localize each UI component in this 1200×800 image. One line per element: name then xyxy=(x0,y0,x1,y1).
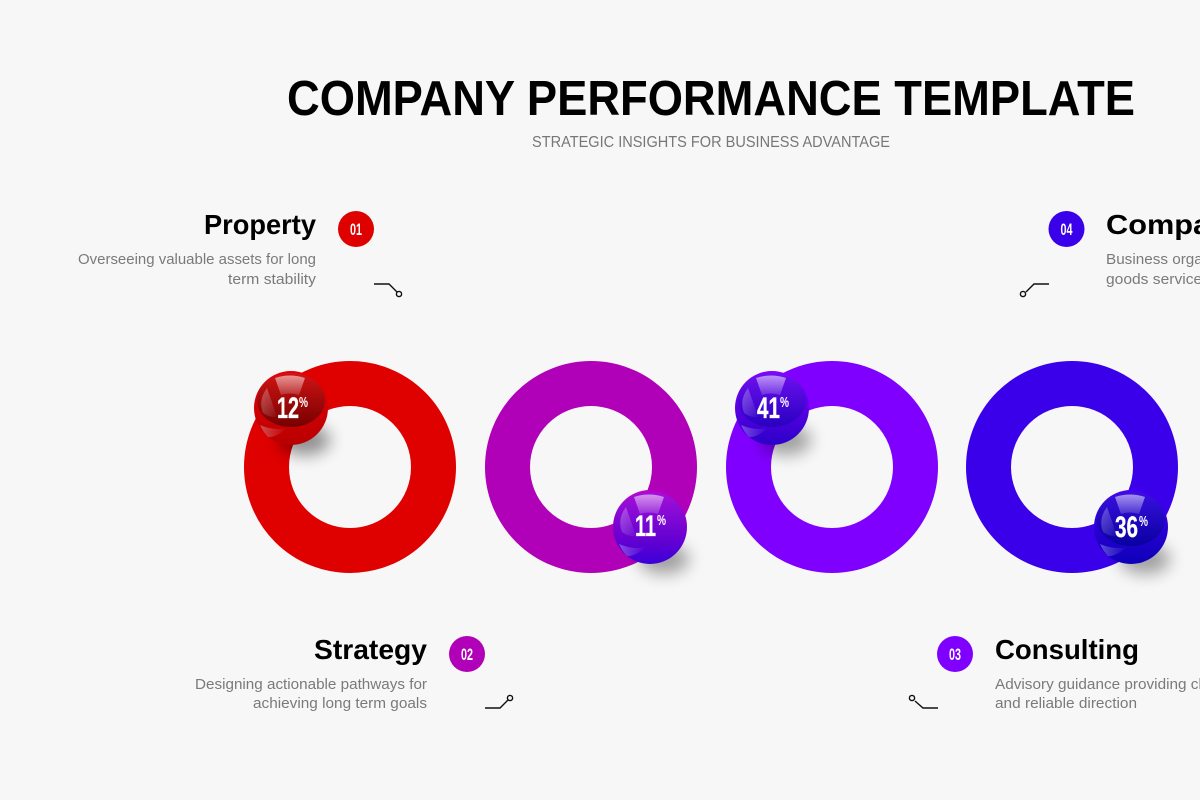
sphere: 36 percent xyxy=(1094,490,1170,574)
sphere: 11 percent xyxy=(613,490,689,574)
description: strategy xyxy=(195,676,427,712)
ring: strategy xyxy=(508,384,674,550)
sphere: 41 percent xyxy=(735,371,811,455)
number badge 02 xyxy=(449,636,485,672)
connector 01 xyxy=(374,284,402,297)
description: property: Overseeing valuable assets for long xyxy=(78,251,316,268)
title: COMPANY PERFORMANCE TEMPLATE xyxy=(287,72,1135,126)
description: consulting xyxy=(995,676,1200,712)
number badge 04: 04 xyxy=(1060,220,1073,239)
description: consulting: and reliable direction xyxy=(995,695,1137,712)
ring: property xyxy=(266,384,434,550)
subtitle: STRATEGIC INSIGHTS FOR BUSINESS ADVANTAGE xyxy=(532,134,890,151)
description: strategy: achieving long term goals xyxy=(253,695,427,712)
panel: consulting label xyxy=(909,634,1200,712)
sphere: 12 percent: % xyxy=(299,394,308,411)
sphere: 36 percent: % xyxy=(1139,513,1148,530)
sphere: 12 percent xyxy=(254,371,330,455)
panel: strategy label xyxy=(195,634,513,712)
connector 04 xyxy=(1020,284,1049,297)
description: property: term stability xyxy=(228,271,317,288)
description: strategy: Designing actionable pathways for xyxy=(195,676,427,693)
sphere: 41 percent: 41 xyxy=(757,392,780,425)
sphere: 36 percent: 36 xyxy=(1115,511,1138,544)
number badge 04 xyxy=(1048,211,1084,247)
panel: company label xyxy=(1020,209,1200,297)
connector 03 xyxy=(909,695,938,708)
heading: strategy: Strategy xyxy=(314,634,427,665)
number badge 01: 01 xyxy=(350,220,362,239)
description: company xyxy=(1106,251,1200,288)
panel: property label xyxy=(78,209,402,297)
heading: property: Property xyxy=(204,209,316,240)
connector 02 xyxy=(485,695,513,708)
ring: company xyxy=(988,384,1156,550)
sphere: 41 percent: % xyxy=(780,394,789,411)
ring: consulting xyxy=(748,384,916,550)
number badge 02: 02 xyxy=(461,645,473,664)
sphere: 11 percent: 11 xyxy=(635,510,656,543)
number badge 03: 03 xyxy=(949,645,961,664)
sphere: 11 percent: % xyxy=(657,512,666,529)
sphere: 12 percent: 12 xyxy=(277,392,299,425)
heading: consulting: Consulting xyxy=(995,634,1139,665)
number badge 03 xyxy=(937,636,973,672)
description: property xyxy=(78,251,317,288)
number badge 01 xyxy=(338,211,374,247)
